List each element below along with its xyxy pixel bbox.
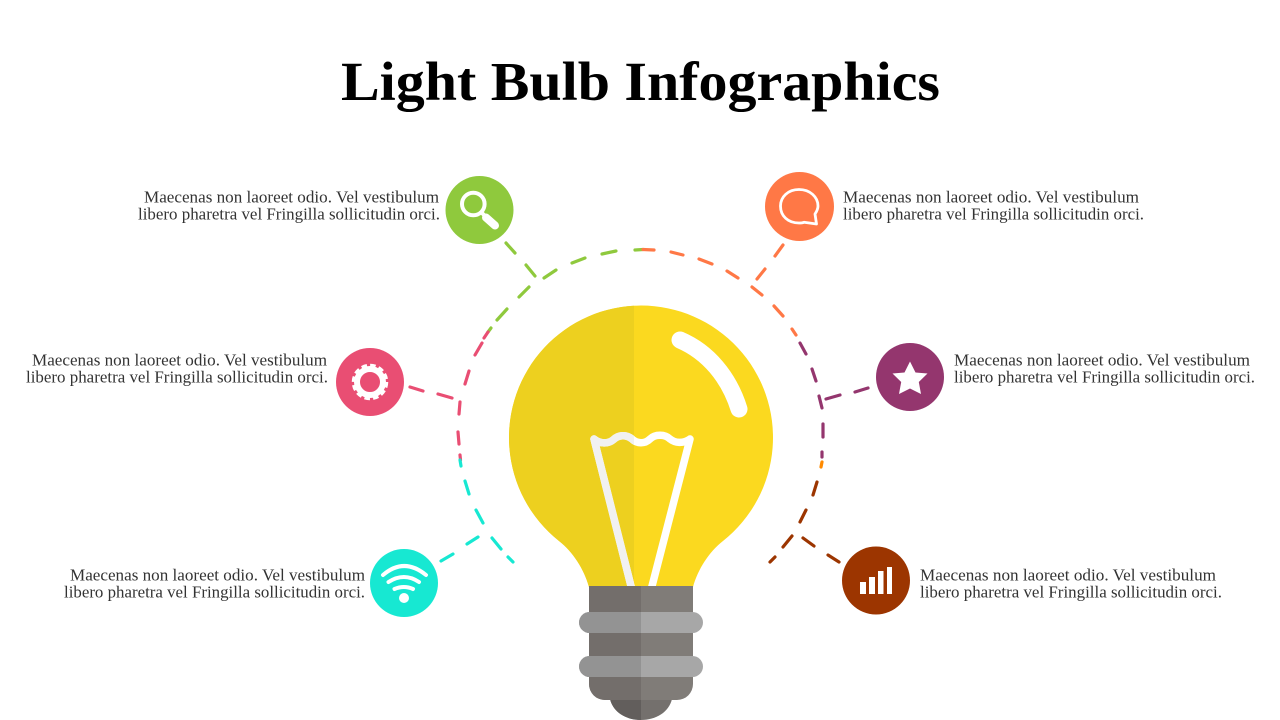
- glass highlight: [680, 340, 739, 409]
- bulb glass: [509, 306, 773, 587]
- text block: middle left: [26, 350, 328, 386]
- text block: top right: [843, 188, 1144, 224]
- dashed connector: green: [488, 243, 643, 332]
- screw band upper: [579, 612, 703, 633]
- text block: bottom left: [64, 566, 365, 602]
- text block: middle right: libero pharetra vel Fringilla sollicitudin orci.: [954, 368, 1255, 386]
- text block: middle right: Maecenas non laoreet odio. Vel vestibulum: [954, 350, 1250, 370]
- dashed connector: purple: [800, 343, 868, 457]
- filament: [594, 435, 690, 590]
- text block: middle left: libero pharetra vel Fringilla sollicitudin orci.: [26, 368, 328, 386]
- screw base: [589, 586, 693, 700]
- text block: bottom right: Maecenas non laoreet odio. Vel vestibulum: [920, 566, 1216, 584]
- icon: search on green circle: [446, 176, 514, 244]
- text block: bottom left: libero pharetra vel Fringilla sollicitudin orci.: [64, 582, 365, 602]
- text block: middle left: Maecenas non laoreet odio. Vel vestibulum: [32, 350, 327, 370]
- light bulb: [509, 306, 773, 720]
- text block: top left: libero pharetra vel Fringilla sollicitudin orci.: [138, 204, 440, 224]
- icon: wifi on teal circle: [370, 549, 438, 617]
- icon: star on purple circle: [876, 343, 944, 411]
- text block: bottom left: Maecenas non laoreet odio. Vel vestibulum: [70, 566, 365, 584]
- dashed connector: orange: [643, 245, 796, 335]
- text block: top left: Maecenas non laoreet odio. Vel vestibulum: [144, 188, 439, 206]
- text block: bottom right: [920, 566, 1222, 602]
- text block: top left: [138, 188, 440, 224]
- dashed connector: colour joins: [821, 462, 822, 467]
- text block: bottom right: libero pharetra vel Fringilla sollicitudin orci.: [920, 582, 1222, 602]
- text block: top right: Maecenas non laoreet odio. Vel vestibulum: [843, 188, 1139, 206]
- icon: gear on pink circle: [336, 348, 404, 416]
- icon: bar chart on brown circle: [842, 546, 910, 614]
- screw cap tip: [610, 699, 672, 720]
- title: Light Bulb Infographics: [341, 51, 940, 112]
- text block: top right: libero pharetra vel Fringilla sollicitudin orci.: [843, 204, 1144, 224]
- dashed connector: teal: [441, 460, 513, 562]
- icon: speech bubble on orange circle: [765, 172, 834, 241]
- dashed connector: brown: [770, 482, 839, 562]
- dashed connector: pink: [410, 332, 488, 460]
- text block: middle right: [954, 350, 1255, 386]
- screw band lower: [579, 656, 703, 677]
